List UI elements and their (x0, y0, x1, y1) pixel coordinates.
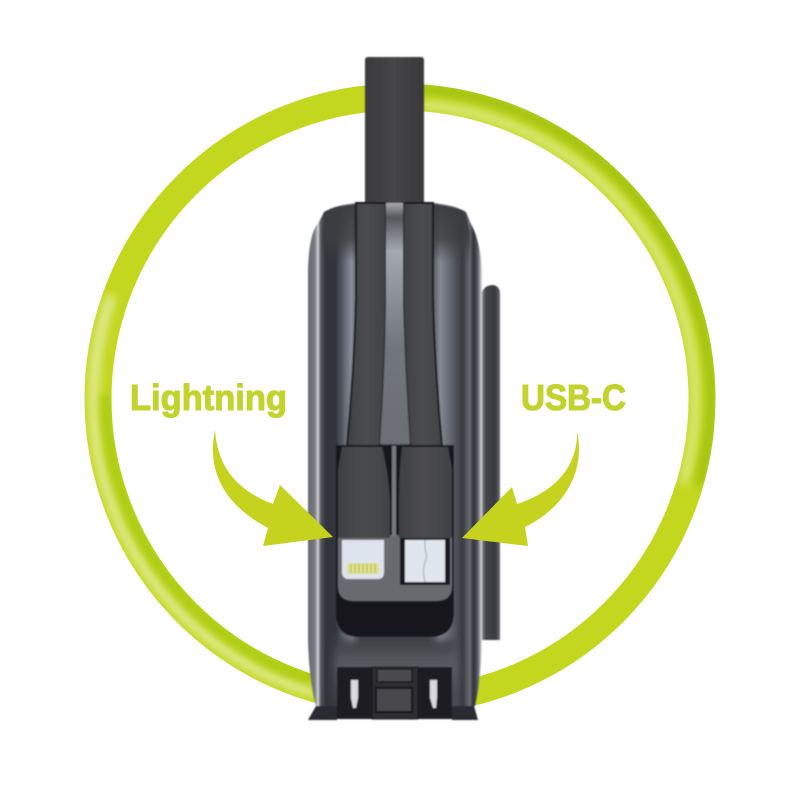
left connector cover (338, 447, 390, 538)
arrow: to USB-C connector (462, 431, 579, 546)
body (308, 203, 482, 706)
body top shading (322, 204, 470, 262)
lightning tip (342, 540, 384, 579)
arrow: to Lightning connector (213, 430, 333, 546)
cavity gray panel (338, 535, 452, 601)
feet (308, 706, 478, 720)
usb-c tip (400, 538, 450, 585)
center pin (392, 446, 396, 536)
label: Lightning: Lightning (130, 377, 287, 418)
cavity (336, 445, 454, 637)
bottom clip (337, 667, 452, 719)
right connector cover (399, 447, 452, 538)
label: USB-C: USB-C (521, 377, 626, 418)
cable right (403, 203, 442, 446)
magnetic disc (482, 285, 500, 640)
green ring (94, 89, 711, 701)
body lower shading (334, 640, 456, 706)
power bank device (308, 57, 500, 720)
strap (365, 57, 424, 204)
center strip (380, 203, 410, 444)
cable left (347, 203, 386, 446)
